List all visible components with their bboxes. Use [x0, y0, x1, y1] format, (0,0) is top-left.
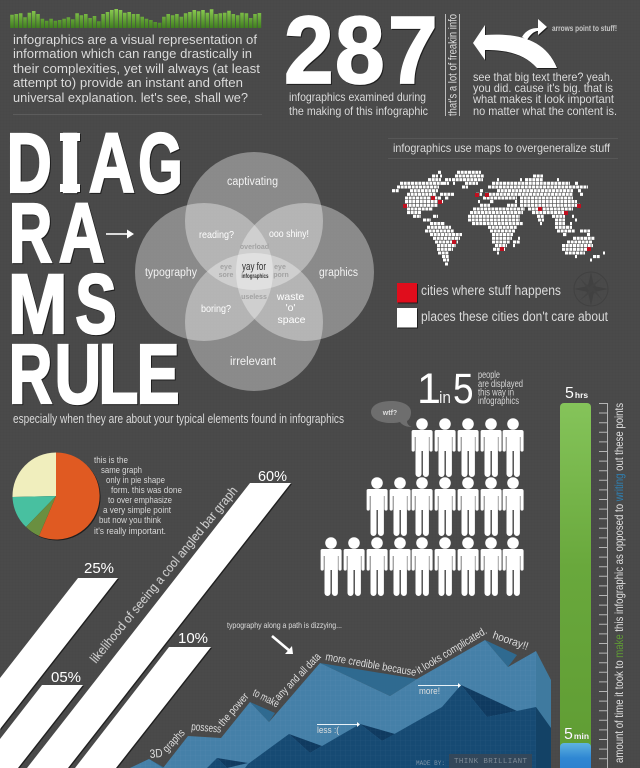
pie caption: form. this was done [111, 485, 182, 496]
venn diagram: 'o' [286, 302, 295, 314]
venn diagram: typography [145, 267, 197, 279]
title: diagrams rule: M [8, 256, 67, 351]
venn diagram: useless [241, 294, 267, 301]
angled bar chart: 25% [84, 560, 114, 577]
pie caption: same graph [101, 465, 142, 476]
intro paragraph: their complexities, yet will always (at least [13, 61, 260, 76]
venn diagram: eye [220, 264, 232, 271]
angled bar chart: 05% [51, 669, 81, 686]
legend [397, 283, 608, 328]
typography along the chart path: possess [191, 721, 222, 736]
pie caption: only in pie shape [106, 475, 165, 486]
time bar: blue write [560, 726, 591, 768]
bar strip: green equalizer [12, 9, 259, 28]
time bar: green make: 5hrs [565, 385, 588, 402]
watermark: THINK BRILLIANT [454, 758, 527, 766]
venn diagram: overload [240, 244, 269, 251]
1 in 5 heading [417, 365, 523, 413]
venn diagram: waste [276, 291, 304, 303]
typography along the chart path: graphs [160, 727, 188, 755]
title: diagrams rule: A [89, 115, 135, 210]
venn diagram: graphics [319, 267, 358, 279]
intro paragraph [13, 32, 260, 105]
1 in 5 heading: people [478, 370, 500, 381]
typography along the chart path: it looks complicated. [414, 625, 489, 677]
pie caption [94, 455, 182, 537]
text: big text explanation: what makes it look important [472, 92, 615, 106]
pie caption: a very simple point [103, 505, 171, 516]
arrow to venn [106, 230, 134, 238]
pie caption: this is the [94, 455, 128, 466]
title: diagrams rule: L [98, 327, 138, 421]
text: big text explanation: no matter what the content is. [473, 104, 617, 118]
angled bar chart: likelihood of seeing a cool angled bar graph [87, 484, 241, 666]
venn diagram: captivating [227, 176, 278, 188]
icon: split arrow [473, 19, 557, 68]
venn diagram: sore [219, 272, 233, 279]
angled bar chart: 10% [178, 630, 208, 647]
pictogram people [321, 418, 524, 596]
speech bubble: wtf? [382, 410, 397, 417]
icon: compass rose [574, 272, 608, 306]
venn diagram [135, 152, 374, 391]
venn diagram: yay for [242, 261, 266, 273]
title: diagrams rule: I [58, 116, 82, 210]
title: diagrams rule: E [136, 327, 180, 421]
3D area chart [130, 640, 551, 768]
title: diagrams rule: D [7, 116, 52, 210]
typography along the chart path: more credible because [324, 651, 417, 679]
watermark [416, 754, 532, 768]
legend: cities where stuff happens [421, 283, 561, 298]
1 in 5 heading: 5 [453, 365, 474, 413]
intro paragraph: infographics are a visual representation of [13, 32, 257, 47]
pie chart [12, 452, 100, 539]
text: big text explanation [472, 70, 617, 118]
chart annotation: more: more! [419, 686, 440, 696]
chart annotation: less [317, 722, 360, 735]
pie caption: but now you think [99, 515, 161, 526]
map heading [388, 138, 618, 158]
venn diagram: reading? [199, 229, 234, 241]
title: diagrams rule: G [138, 117, 183, 211]
typography along the chart path: the power [216, 691, 252, 729]
caption for 287 [289, 90, 428, 118]
title: diagrams rule: S [75, 257, 117, 351]
venn diagram: boring? [201, 303, 231, 315]
1 in 5 heading: are displayed [478, 379, 523, 390]
pie caption: it's really important. [94, 526, 166, 537]
big number 287 [284, 0, 438, 104]
venn diagram: porn [273, 272, 289, 279]
1 in 5 heading: this way in [478, 388, 514, 398]
title subtext: especially when they are about your typical elements found in infographics [13, 412, 344, 426]
venn diagram: eye [274, 264, 286, 271]
speech bubble [371, 401, 412, 427]
title: diagrams rule [7, 115, 183, 421]
typography along the chart path: 3D [149, 746, 163, 761]
map heading: infographics use maps to overgeneralize stuff [393, 141, 611, 155]
path typography note: typography along a path is dizzying... [227, 620, 342, 630]
ruler [599, 403, 608, 768]
1 in 5 heading: in [439, 388, 451, 407]
text: big text explanation: see that big text there? yeah. [473, 70, 613, 84]
title: diagrams rule: A [59, 185, 105, 280]
intro paragraph: information which can range drastically in [13, 46, 252, 61]
legend: places these cities don't care about [421, 309, 608, 324]
angled bar chart: 60% [258, 468, 287, 485]
intro paragraph: attempt to) provide an instant and often [13, 75, 243, 90]
venn diagram: ooo shiny! [269, 228, 309, 240]
chart annotation: more [418, 683, 461, 696]
typography along the chart path: any and all data [273, 650, 324, 703]
1 in 5 heading: infographics [478, 396, 519, 407]
venn diagram: irrelevant [230, 356, 277, 368]
arrow: to path text [272, 636, 293, 654]
pie caption: to over emphasize [108, 495, 172, 506]
title: diagrams rule: U [54, 327, 101, 421]
vertical time caption: amount of time it took to make this infographic as opposed to writing out these points [612, 403, 626, 763]
venn diagram: infographics [242, 273, 269, 280]
typography along the chart path: hooray!! [491, 629, 530, 653]
arrow caption: arrows point to stuff! [552, 23, 617, 33]
angled bar chart [0, 468, 291, 768]
chart annotation: less: less :( [317, 725, 339, 735]
title: diagrams rule: R [9, 186, 52, 280]
intro paragraph: universal explanation. let's see, shall we? [13, 90, 248, 105]
title: diagrams rule: R [9, 327, 52, 421]
dotted world map [392, 172, 605, 264]
typography along the chart path: to make [251, 687, 281, 710]
text: big text explanation: you did. cause it's big. that is [473, 81, 613, 95]
venn diagram: space [277, 314, 306, 326]
time bar: green make [560, 385, 591, 768]
typography along the chart path [149, 625, 530, 761]
time bar: blue write: 5min [564, 726, 589, 743]
1 in 5 heading: 1 [417, 365, 441, 413]
caption for 287: infographics examined during [289, 90, 426, 104]
watermark: MADE BY: [416, 760, 445, 767]
caption for 287: the making of this infographic [289, 104, 428, 118]
